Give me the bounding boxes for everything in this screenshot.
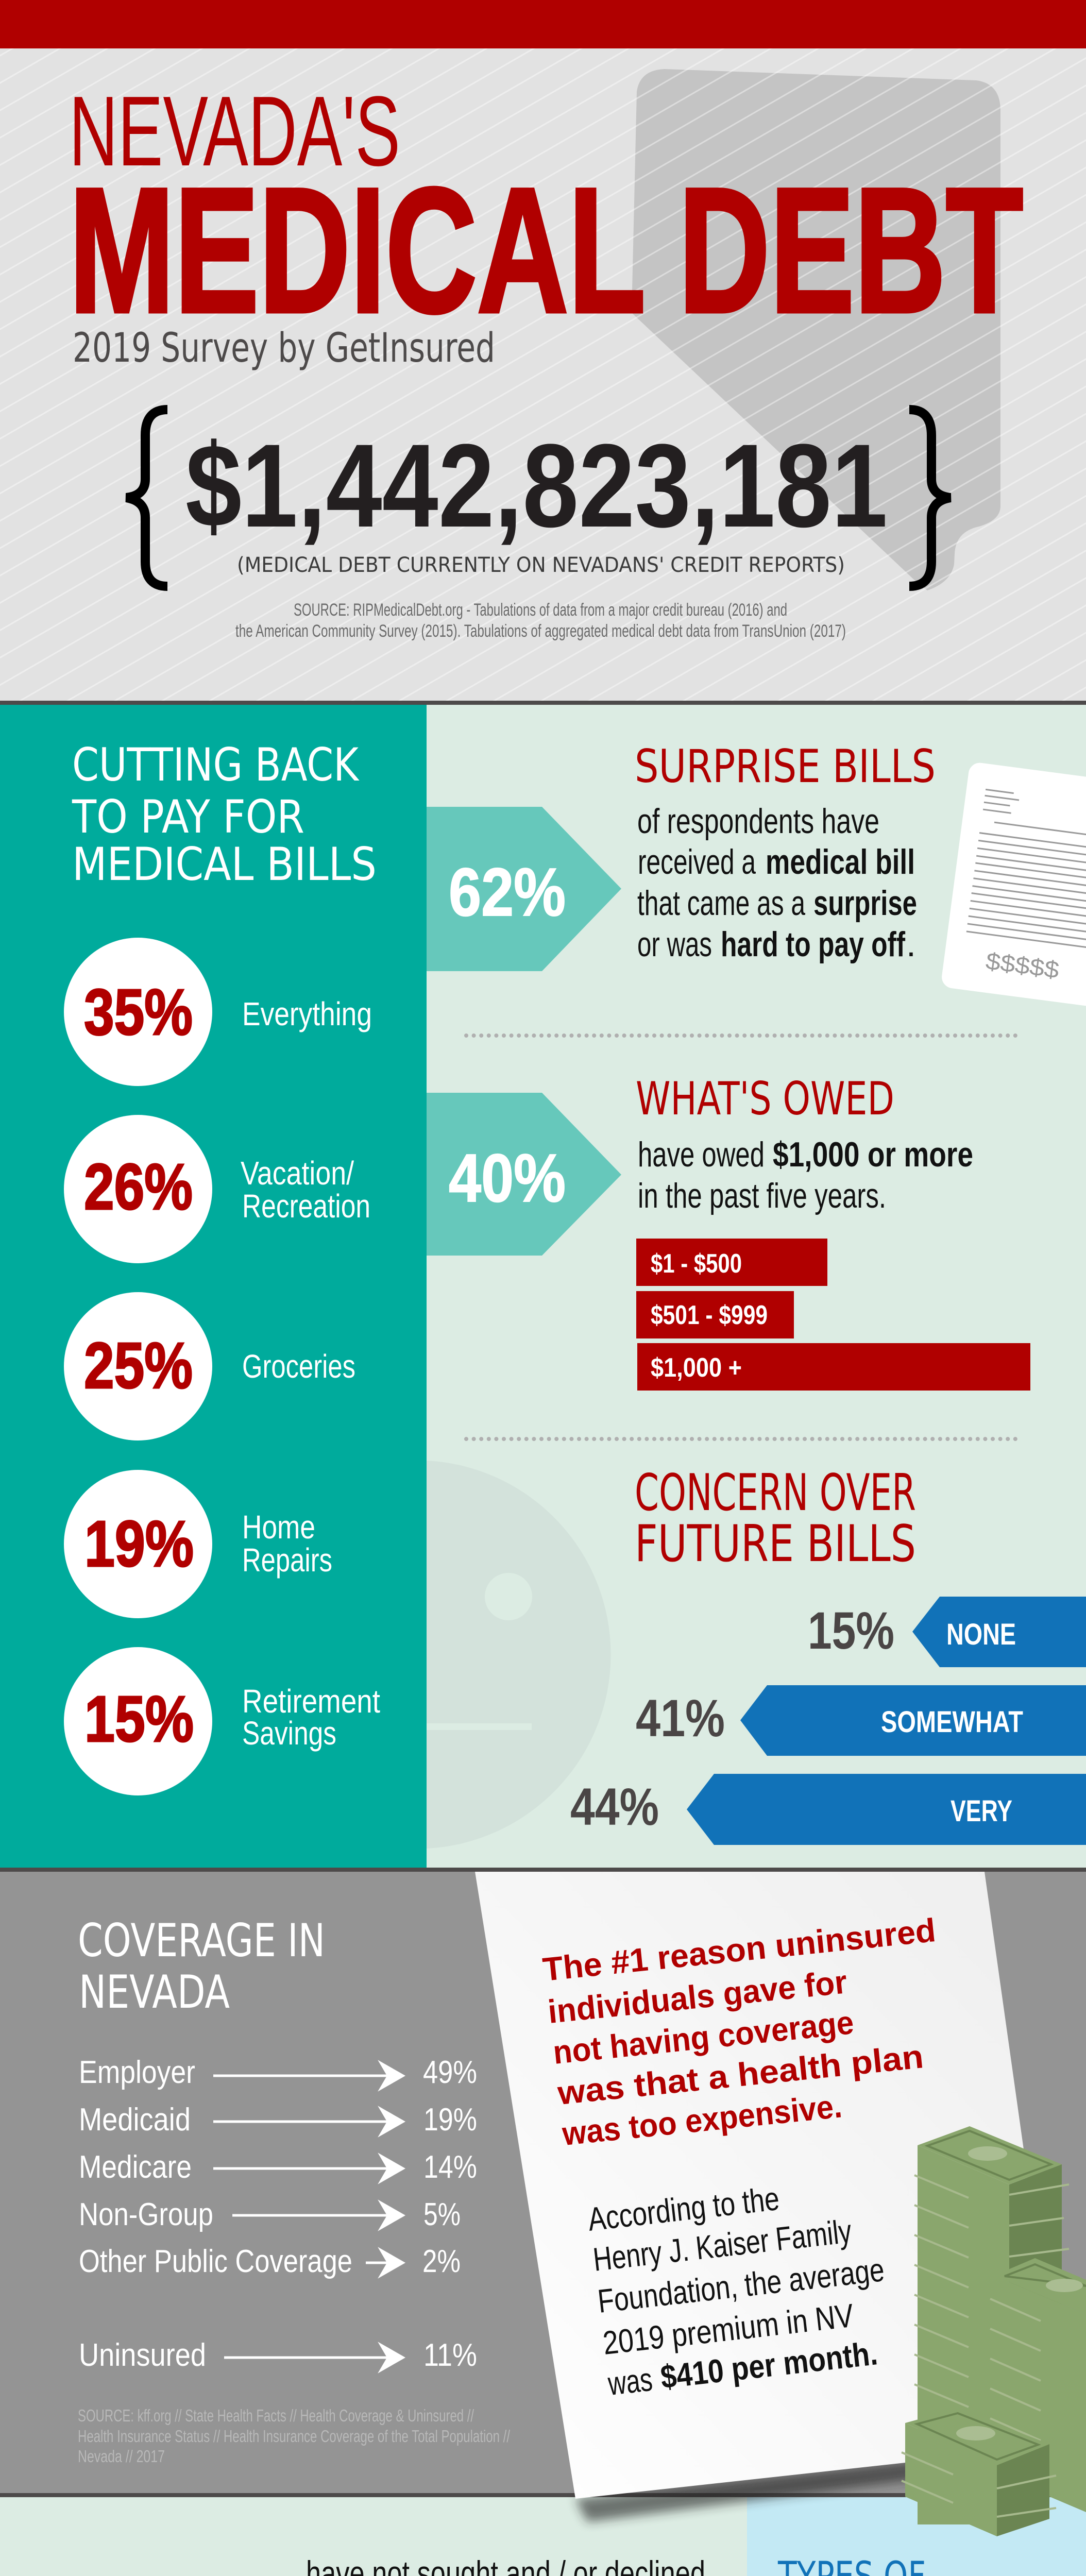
stat: vacation: Recreation [242,1188,370,1225]
arrow: 62 percent [427,807,621,971]
divider [466,1033,1019,1038]
text: surprise bills body: surprise [813,884,917,923]
text: surprise bills body: medical bill [766,842,915,882]
callout: paper note [475,1872,1065,2499]
bar chart: amounts owed: $501 - $999 [651,1300,768,1330]
heading: cutting back: CUTTING BACK [72,738,360,791]
panel: survey findings [427,705,1086,1868]
heading: coverage: COVERAGE IN [78,1914,325,1967]
arrow: 62 percent: 62% [449,854,566,930]
stat: home repairs: Home [242,1509,315,1546]
coverage list: 14% [423,2149,477,2185]
text: surprise bills body: or was [637,925,712,964]
icon: neutral face [427,1461,611,1849]
callout: premium text: $410 per month. [659,2334,879,2396]
coverage list [79,2055,477,2373]
panel: header [0,48,1086,701]
concern: somewhat: 41% [636,1689,725,1748]
stat: vacation: 26% [84,1150,193,1223]
concern: none [808,1597,1086,1667]
bar chart: amounts owed [636,1239,1030,1391]
concern: very [570,1774,1086,1845]
text: what's owed body [638,1135,973,1215]
coverage list: 2% [422,2244,461,2279]
money stack: front [902,2409,1056,2536]
top red bar [0,0,1086,48]
money stack: middle [990,2258,1086,2512]
heading: concern over future bills: FUTURE BILLS [635,1515,916,1573]
text: what's owed body: in the past five years. [638,1176,886,1215]
panel: types of medical debt [747,2497,1086,2576]
concern: somewhat [636,1685,1086,1756]
stat: retirement savings: 15% [84,1683,194,1755]
stat: home repairs [64,1470,332,1618]
left brace [126,410,167,586]
callout: red statement [541,1911,937,2153]
heading: concern over future bills: CONCERN OVER [635,1464,916,1522]
source note: Health Insurance Status // Health Insurance Coverage of the Total Population // [78,2427,511,2446]
concern: none: NONE [946,1618,1016,1651]
stat: everything [64,938,372,1086]
concern: very: VERY [951,1794,1012,1828]
concern: none: 15% [808,1601,894,1660]
stat: vacation: Vacation/ [241,1155,354,1192]
callout: red statement: was too expensive. [560,2087,844,2153]
heading: cutting back: MEDICAL BILLS [72,838,377,891]
stat: groceries [64,1292,355,1440]
arrow: 40 percent: 40% [449,1140,566,1216]
stat: everything: Everything [242,995,372,1032]
callout: premium text: Henry J. Kaiser Family [591,2212,853,2278]
source note: the American Community Survey (2015). Tabulations of aggregated medical debt data from TransUnion (2017) [235,621,846,641]
divider [466,1437,1019,1441]
text: surprise bills body: that came as a [637,884,805,923]
concern: somewhat: SOMEWHAT [881,1705,1023,1739]
coverage list: Other Public Coverage [79,2244,352,2279]
callout: premium text: According to the [586,2180,781,2238]
right brace [909,410,951,586]
total debt figure: $1,442,823,181 [185,419,888,552]
icon: stacks of money [902,2126,1086,2536]
text: surprise bills body: . [906,925,916,964]
stat: retirement savings: Retirement [242,1683,380,1720]
coverage list: 5% [423,2197,461,2232]
callout: premium text: was [606,2361,654,2402]
source note: SOURCE: kff.org // State Health Facts // Health Coverage & Uninsured // [78,2406,474,2425]
coverage list: Medicare [79,2149,192,2185]
concern: very: 44% [570,1777,659,1836]
paper shadow [575,2460,927,2522]
heading: cutting back: TO PAY FOR [72,790,304,843]
text: surprise bills body [637,802,917,964]
coverage list: 19% [423,2102,477,2138]
panel: cutting back [0,701,1086,1868]
source note [78,2406,511,2466]
stat: groceries: 25% [84,1329,193,1402]
stat: groceries: Groceries [242,1348,355,1385]
heading: surprise bills: SURPRISE BILLS [635,740,936,793]
stat: home repairs: Repairs [242,1541,332,1579]
callout: premium text: 2019 premium in NV [601,2297,856,2362]
icon: paper bill: $$$$$ [984,947,1061,984]
heading: what's owed: WHAT'S OWED [636,1072,894,1125]
bar chart: amounts owed: $1 - $500 [651,1249,742,1279]
heading: coverage: NEVADA [79,1965,230,2019]
coverage list: Employer [79,2055,195,2090]
coverage list: 11% [423,2337,477,2373]
text: what's owed body: $1,000 or more [773,1135,973,1174]
text: surprise bills body: received a [638,842,756,882]
heading: concern over future bills [635,1464,916,1573]
heading: cutting back [72,738,377,891]
stat: home repairs: 19% [84,1507,194,1580]
panel: medical debt findings [0,2497,747,2576]
stat: vacation [64,1115,370,1263]
subtitle: 2019 Survey by GetInsured [73,325,495,371]
callout: red statement: The #1 reason uninsured [541,1911,937,1988]
text: surprise bills body: of respondents have [637,802,879,841]
stat: retirement savings: Savings [242,1715,336,1752]
text: surprise bills body: hard to pay off [721,925,905,964]
coverage list: Uninsured [79,2337,206,2373]
coverage list: 49% [423,2055,477,2090]
coverage list: Non-Group [79,2197,213,2232]
source note [235,600,846,641]
coverage list: Medicaid [79,2102,191,2138]
callout: red statement: was that a health plan [555,2038,925,2112]
callout: red statement: individuals gave for [546,1963,849,2030]
bar chart: amounts owed: $1,000 + [651,1353,742,1383]
text: what's owed body: have owed [638,1135,765,1174]
stat: retirement savings [64,1647,380,1795]
source note: Nevada // 2017 [78,2447,165,2466]
total debt caption: (MEDICAL DEBT CURRENTLY ON NEVADANS' CREDIT REPORTS) [237,553,845,577]
money stack: tall [914,2126,1069,2524]
callout: premium text [586,2180,886,2402]
callout: premium text: Foundation, the average [596,2251,886,2320]
icon: Nevada state silhouette [632,69,1000,590]
callout: red statement: not having coverage [551,2004,855,2071]
stat: everything: 35% [84,976,193,1048]
arrow: 40 percent [427,1093,621,1256]
heading: coverage [78,1914,325,2019]
icon: paper bill [940,761,1086,1015]
title: Nevada's: NEVADA'S [69,75,400,187]
panel: coverage in Nevada [0,1868,1086,2497]
source note: SOURCE: RIPMedicalDebt.org - Tabulations of data from a major credit bureau (2016) and [294,600,787,620]
